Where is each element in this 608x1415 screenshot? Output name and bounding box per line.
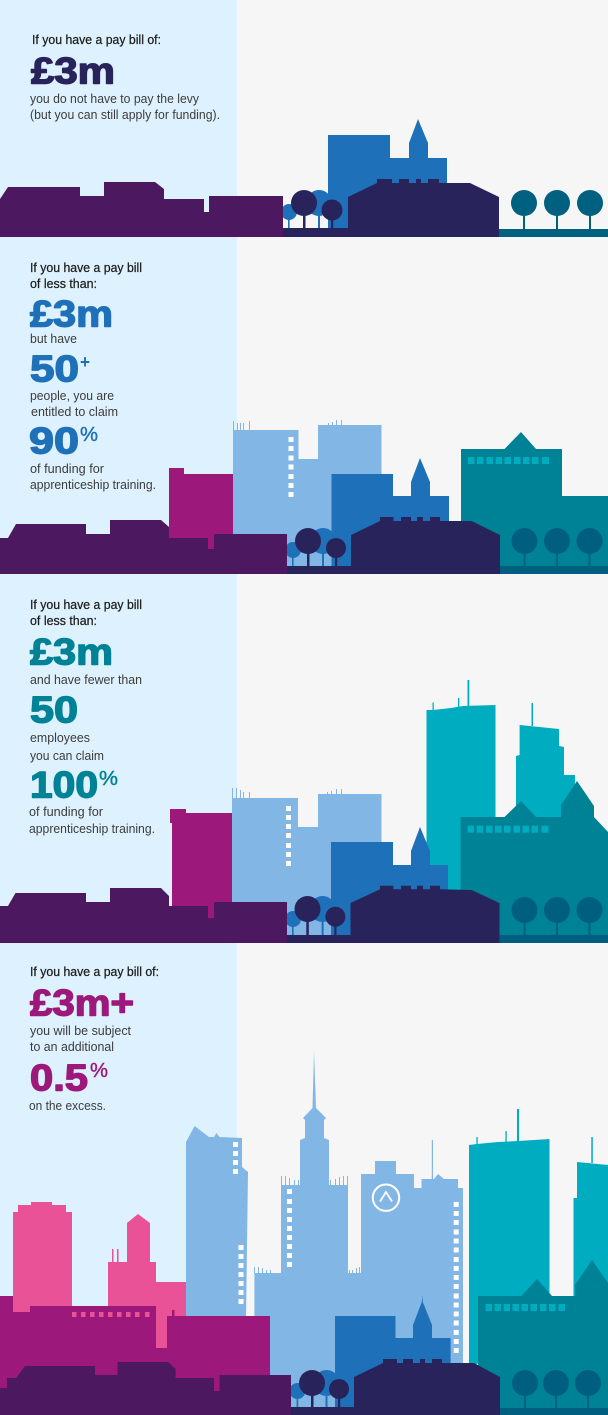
- text: 100%: and have fewer than: [30, 672, 142, 687]
- trees: [289, 1370, 349, 1408]
- text: no levy: (but you can still apply for funding).: [30, 107, 220, 122]
- text: 90%: +: [80, 352, 90, 372]
- blue building: [331, 827, 448, 936]
- panel: over 3m, additional 0.5%: [0, 964, 608, 1415]
- text: 90%: of less than:: [30, 276, 97, 291]
- trees: [285, 896, 345, 936]
- text: 100%: %: [99, 768, 118, 790]
- navy building: [276, 179, 499, 237]
- blue building: [332, 458, 449, 567]
- text: 100%: apprenticeship training.: [29, 821, 155, 836]
- navy building: [280, 517, 500, 574]
- text: 100%: employees: [30, 730, 90, 745]
- windows: [288, 437, 294, 497]
- trees: [285, 528, 346, 567]
- pink windows: [72, 1312, 150, 1317]
- text: 90%: £3m: [30, 294, 113, 334]
- light blue towers: [186, 1051, 463, 1408]
- text: 90%: [29, 260, 156, 492]
- pink buildings: [13, 1202, 198, 1348]
- text: 0.5%: If you have a pay bill of:: [30, 964, 159, 979]
- navy building: [284, 1359, 500, 1415]
- magenta building: [170, 809, 257, 920]
- light blue building: [233, 420, 382, 567]
- text: no levy: [30, 32, 220, 122]
- text: 90%: 50: [30, 348, 79, 390]
- blue building: [335, 1295, 451, 1408]
- text: 100%: you can claim: [30, 748, 104, 763]
- blue building: [328, 119, 447, 229]
- text: 90%: but have: [30, 331, 77, 346]
- row of teal trees: [499, 190, 608, 237]
- purple buildings: [0, 182, 283, 237]
- teal building windows: [486, 1304, 565, 1311]
- text: 100%: If you have a pay bill: [30, 597, 142, 612]
- purple buildings: [0, 888, 287, 943]
- text: 100%: £3m: [30, 632, 113, 672]
- text: 100%: 50: [30, 690, 78, 730]
- purple buildings: [0, 520, 287, 574]
- text: 100%: 100: [30, 764, 98, 806]
- cyan towers: [469, 1109, 608, 1370]
- icon: circled caret logo: [373, 1184, 399, 1211]
- text: 100%: of funding for: [29, 804, 104, 819]
- text: 0.5%: [29, 964, 159, 1113]
- windows: [233, 1142, 459, 1353]
- text: no levy: you do not have to pay the levy: [30, 91, 199, 106]
- magenta building: [169, 468, 276, 552]
- text: 100%: [29, 597, 155, 836]
- text: 90%: apprenticeship training.: [30, 477, 156, 492]
- text: 0.5%: %: [90, 1060, 108, 1082]
- row of teal trees: [500, 1370, 608, 1415]
- purple buildings: [0, 1362, 291, 1415]
- light blue building: [232, 788, 382, 936]
- text: 90%: If you have a pay bill: [30, 260, 142, 275]
- teal building windows: [468, 826, 548, 833]
- text: 0.5%: to an additional: [30, 1039, 114, 1054]
- text: 0.5%: 0.5: [30, 1058, 88, 1098]
- text: 90%: of funding for: [30, 461, 105, 476]
- row of teal trees: [500, 897, 608, 943]
- panel: no levy: [0, 32, 608, 237]
- text: no levy: £3m: [31, 50, 115, 92]
- trees: [281, 190, 342, 229]
- text: 100%: of less than:: [30, 613, 97, 628]
- text: 90%: people, you are: [30, 388, 114, 403]
- text: 90%: 90: [29, 420, 79, 462]
- text: 0.5%: you will be subject: [30, 1023, 131, 1038]
- teal building: [461, 432, 608, 574]
- cyan towers: [426, 680, 575, 892]
- text: 90%: %: [80, 424, 98, 446]
- teal building windows: [468, 457, 549, 464]
- panel: 50+ people, 90% funding: [0, 260, 608, 574]
- text: 0.5%: £3m+: [30, 982, 134, 1024]
- teal building: [478, 1260, 608, 1415]
- windows: [286, 806, 291, 866]
- text: 0.5%: on the excess.: [29, 1098, 106, 1113]
- panel: under 50 employees, 100% funding: [0, 597, 608, 943]
- navy building: [280, 886, 500, 943]
- text: no levy: If you have a pay bill of:: [32, 32, 161, 47]
- teal building: [461, 781, 608, 943]
- text: 90%: entitled to claim: [31, 404, 118, 419]
- row of teal trees: [500, 528, 608, 574]
- magenta buildings: [0, 1296, 270, 1415]
